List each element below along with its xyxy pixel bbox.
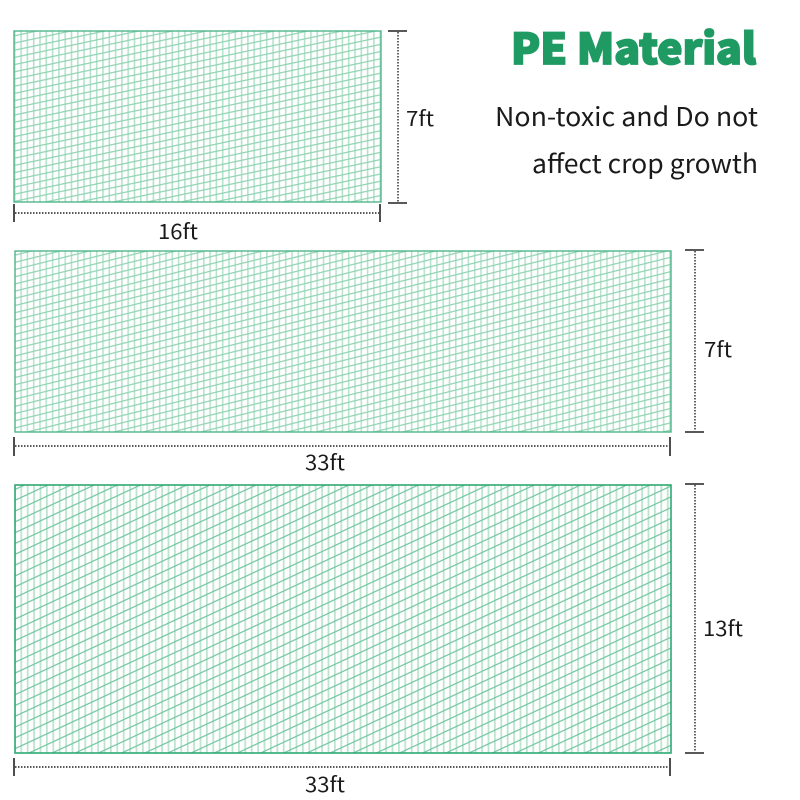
dimension: 33ft width of large net: 33ft (305, 769, 345, 799)
text block: material description (495, 97, 758, 181)
dimension: 7ft height of medium net: 7ft (704, 334, 732, 364)
panel: 33ft by 13ft net (15, 485, 671, 753)
panel: 16ft by 7ft net (14, 31, 381, 202)
text block: material description: Non-toxic and Do not (495, 97, 758, 134)
dimension: 13ft height of large net: 13ft (703, 613, 743, 643)
title: PE Material (511, 16, 756, 77)
dimension: 33ft width of medium net: 33ft (305, 447, 345, 477)
panel: 33ft by 7ft net (15, 251, 671, 432)
dimension: 16ft width of small net: 16ft (158, 216, 198, 246)
text block: material description: affect crop growth (532, 144, 758, 181)
dimension: 7ft height of small net: 7ft (406, 103, 434, 133)
